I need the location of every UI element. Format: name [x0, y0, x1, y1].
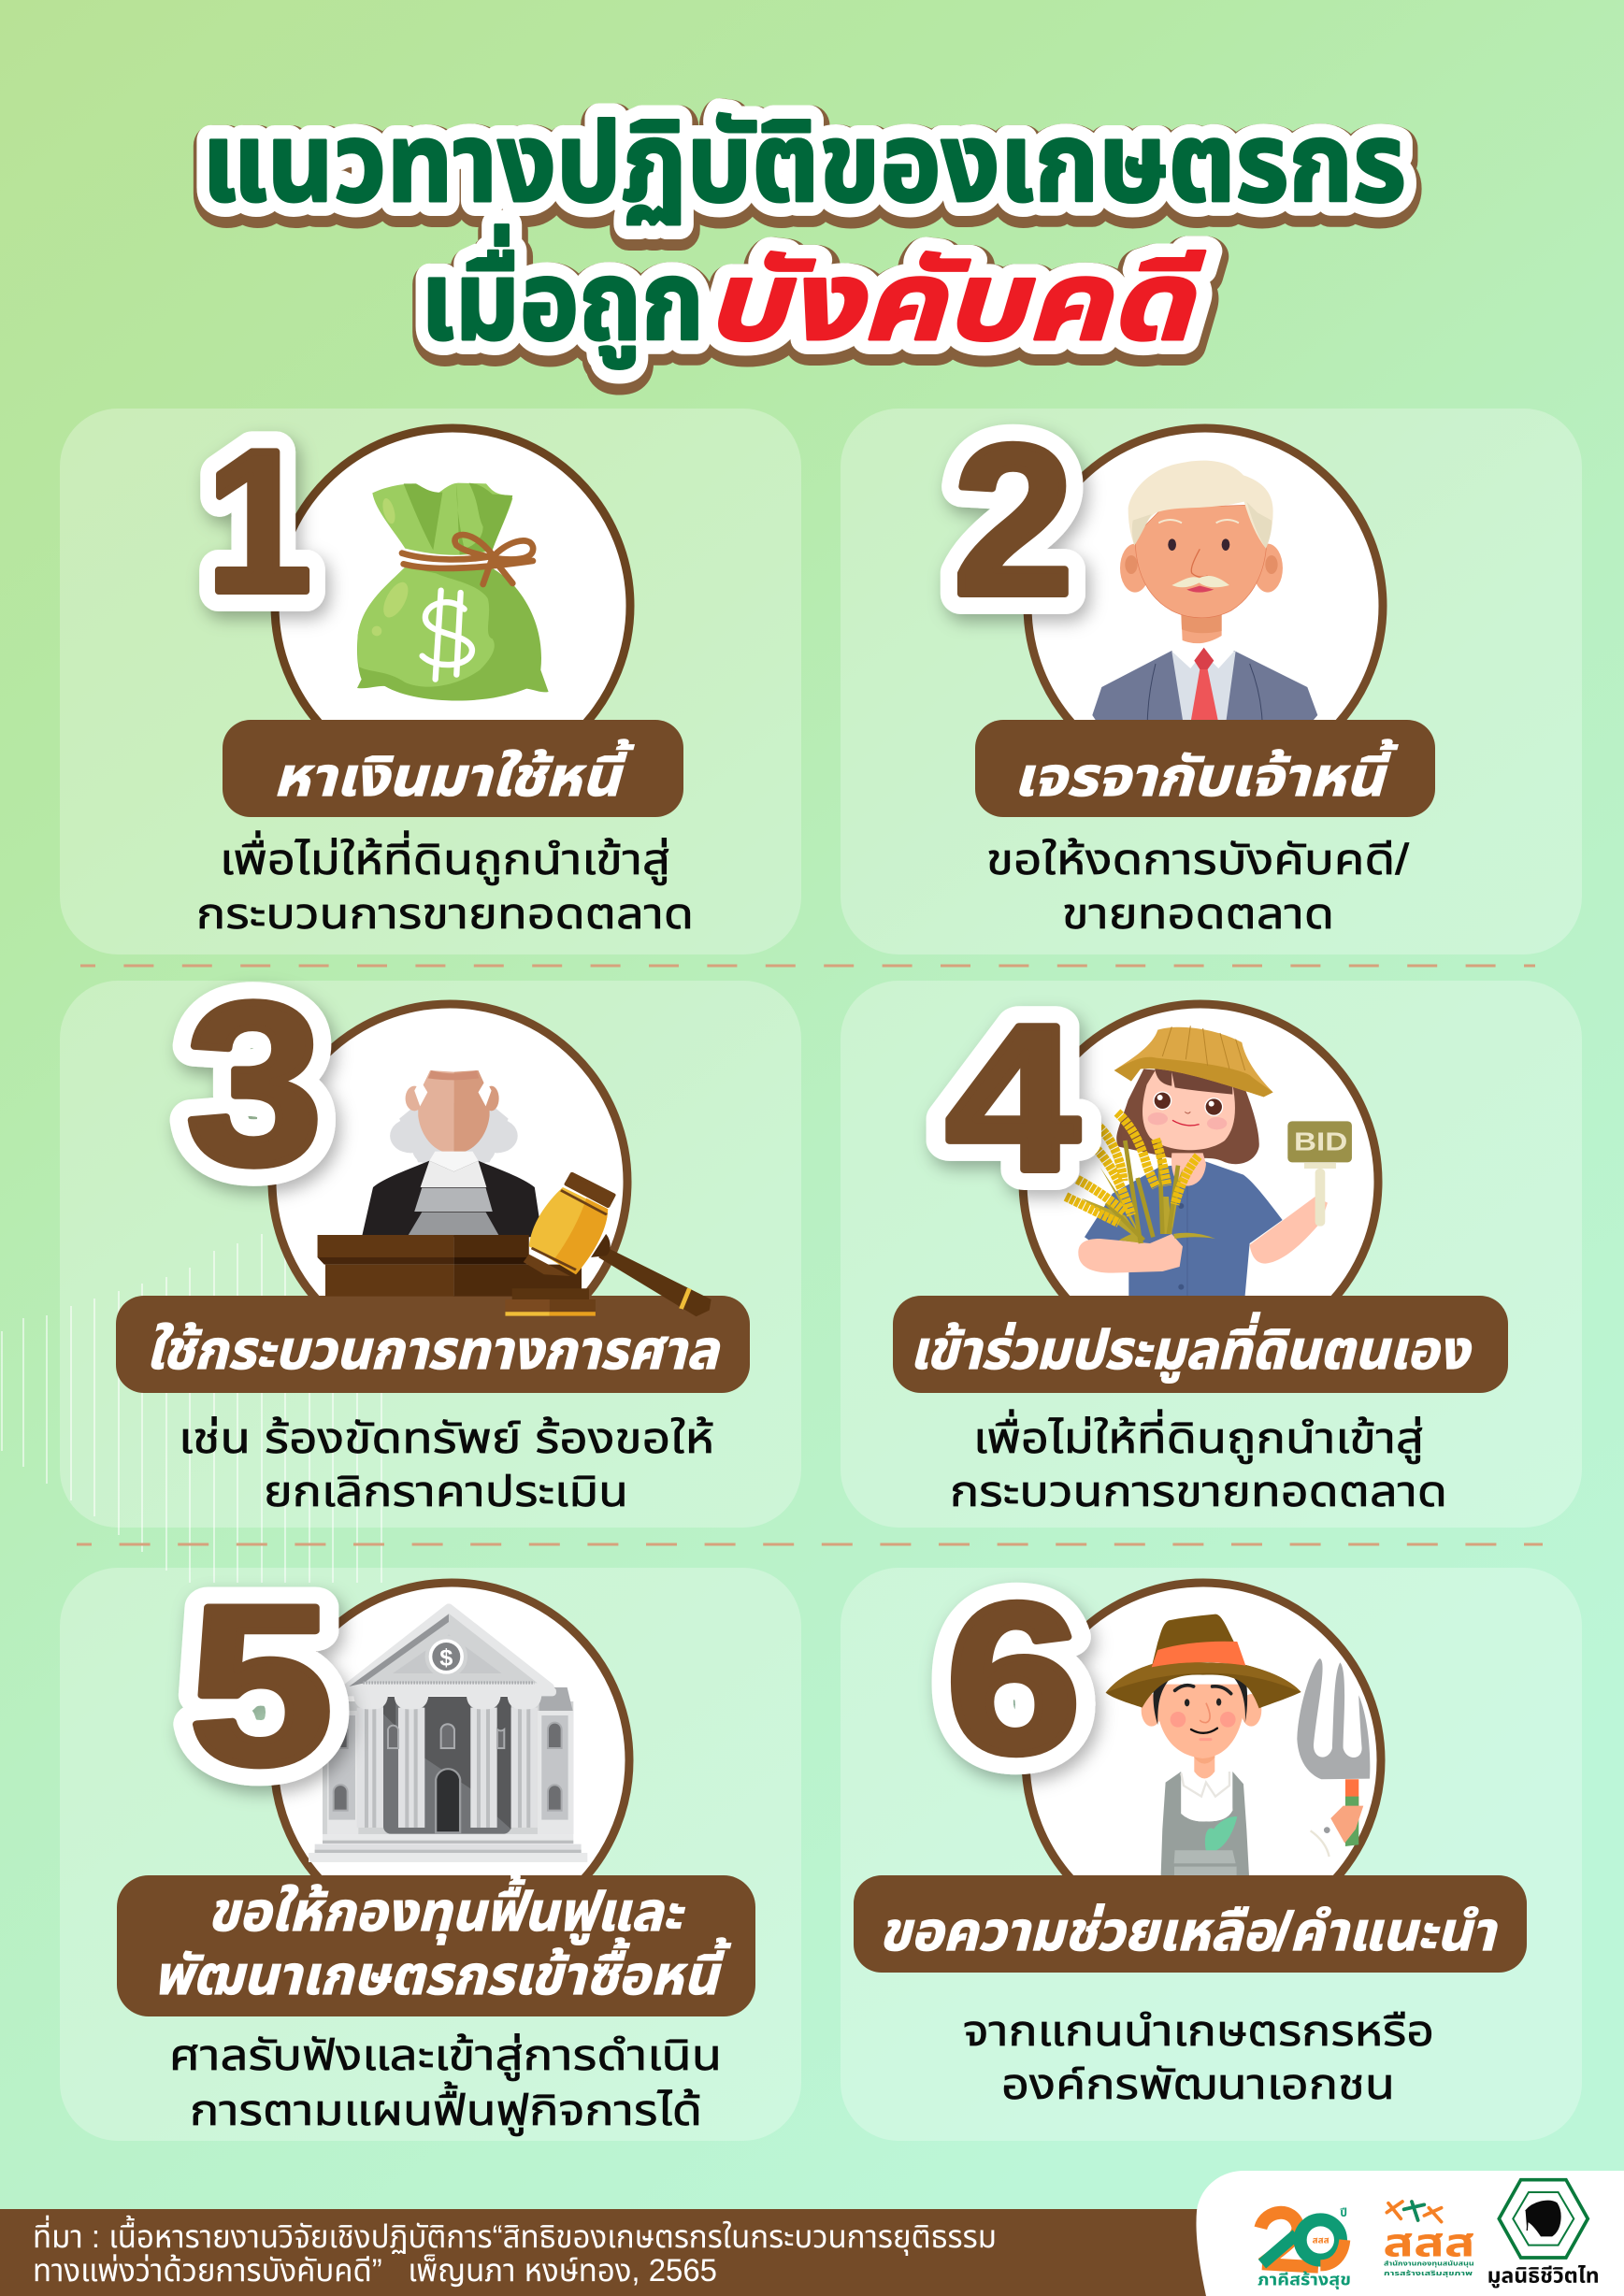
title: เมื่อถูก — [423, 230, 704, 374]
logo: 20 years: ภาคีสร้างสุข — [1258, 2271, 1351, 2290]
number 6: 6 — [946, 1560, 1081, 1798]
logo: Thai Life Foundation — [1487, 2180, 1600, 2288]
panel 2 — [841, 402, 1582, 954]
body 4 — [950, 1409, 1447, 1515]
number 4: 4 — [946, 983, 1079, 1214]
title: บังคับคดี — [705, 240, 1206, 364]
heading 5: พัฒนาเกษตรกรเข้าซื้อหนี้ — [153, 1937, 732, 2006]
logo: ThaiHealth — [1383, 2202, 1475, 2278]
logo: 20 years: สสส — [1313, 2235, 1329, 2246]
body 4: กระบวนการขายทอดตลาด — [950, 1467, 1447, 1515]
panel 1 — [60, 408, 801, 954]
heading 3: ใช้กระบวนการทางการศาล — [146, 1320, 720, 1381]
heading pill 3 — [116, 1296, 750, 1393]
number 2: 2 — [954, 402, 1073, 639]
body 6 — [963, 2006, 1434, 2108]
heading 6: ขอความช่วยเหลือ/คำแนะนำ — [879, 1901, 1498, 1962]
heading pill 4 — [893, 1296, 1508, 1393]
source text: ทางแพ่งว่าด้วยการบังคับคดี” เพ็ญนภา หงษ์ทอง, 2565 — [33, 2253, 717, 2289]
body 3: เช่น ร้องขัดทรัพย์ ร้องขอให้ — [179, 1413, 714, 1462]
body 6: จากแกนนำเกษตรกรหรือ — [963, 2006, 1434, 2055]
panel 4 — [841, 981, 1582, 1528]
title: บังคับคดี — [705, 240, 1206, 364]
footer source bar — [0, 2209, 1225, 2296]
title: แนวทางปฏิบัติของเกษตรกร — [202, 102, 1406, 225]
logo: 20 years: ปี — [1340, 2206, 1347, 2219]
title: แนวทางปฏิบัติของเกษตรกร — [202, 102, 1406, 225]
body 6: องค์กรพัฒนาเอกชน — [1001, 2059, 1395, 2108]
body 3 — [179, 1413, 714, 1515]
body 5 — [169, 2031, 722, 2136]
title: เมื่อถูก — [421, 224, 704, 368]
number 3: 3 — [186, 955, 323, 1213]
logo: ThaiHealth: สสส — [1383, 2220, 1475, 2264]
icon: farmer woman with rice: BID — [1294, 1127, 1347, 1156]
icon: old man in suit — [1092, 461, 1317, 720]
footer logos tab — [1196, 2171, 1624, 2296]
panel 5 — [60, 1559, 801, 2141]
logo: Thai Life Foundation: มูลนิธิชีวิตไท — [1487, 2263, 1600, 2288]
source text — [33, 2215, 997, 2289]
body 5: การตามแผนฟื้นฟูกิจการได้ — [190, 2081, 702, 2136]
heading 4: เข้าร่วมประมูลที่ดินตนเอง — [910, 1312, 1472, 1384]
panel 3 — [60, 955, 801, 1528]
heading 2: เจรจากับเจ้าหนี้ — [1013, 739, 1399, 808]
title: แนวทางปฏิบัติของเกษตรกร — [204, 108, 1406, 231]
logo: 20 years — [1258, 2206, 1351, 2290]
logo: ThaiHealth: การสร้างเสริมสุขภาพ — [1384, 2270, 1473, 2278]
title: เมื่อถูก — [421, 224, 704, 368]
body 5: ศาลรับฟังและเข้าสู่การดำเนิน — [169, 2031, 722, 2081]
source text: ที่มา : เนื้อหารายงานวิจัยเชิงปฏิบัติการ“สิทธิของเกษตรกรในกระบวนการยุติธรรม — [33, 2215, 997, 2256]
panel 6 — [841, 1560, 1582, 2141]
number 4: 4 — [946, 983, 1079, 1214]
body 2 — [986, 835, 1409, 938]
body 2: ขอให้งดการบังคับคดี/ — [986, 835, 1409, 883]
number 3: 3 — [186, 955, 323, 1213]
number 1: 1 — [207, 408, 311, 634]
number 1: 1 — [207, 408, 311, 634]
icon: bank building — [309, 1608, 587, 1862]
heading 5 — [153, 1873, 732, 2006]
body 1: เพื่อไม่ให้ที่ดินถูกนำเข้าสู่ — [220, 830, 670, 885]
body 1 — [196, 830, 694, 938]
heading pill 1 — [223, 720, 683, 817]
body 2: ขายทอดตลาด — [1062, 889, 1334, 938]
divider — [80, 965, 1535, 967]
logo: ThaiHealth: สำนักงานกองทุนสนับสนุน — [1384, 2260, 1474, 2268]
heading 5: ขอให้กองทุนฟื้นฟูและ — [208, 1873, 685, 1945]
body 3: ยกเลิกราคาประเมิน — [264, 1467, 628, 1515]
heading pill 6 — [854, 1875, 1527, 1973]
number 5: 5 — [189, 1559, 333, 1812]
heading pill 5 — [117, 1875, 755, 2016]
icon: male farmer with fork — [1106, 1614, 1370, 1875]
title — [202, 102, 1406, 374]
background vertical lines — [2, 1187, 381, 1583]
body 1: กระบวนการขายทอดตลาด — [196, 889, 694, 938]
heading pill 2 — [975, 720, 1435, 817]
icon: farmer woman with rice — [1066, 1026, 1352, 1296]
divider — [77, 1543, 1543, 1546]
icon: judge with gavel — [318, 1070, 711, 1316]
number 6: 6 — [946, 1560, 1081, 1798]
title: บังคับคดี — [707, 246, 1206, 369]
number 2: 2 — [954, 402, 1073, 639]
body 4: เพื่อไม่ให้ที่ดินถูกนำเข้าสู่ — [973, 1409, 1424, 1464]
icon: money bag — [357, 483, 549, 700]
heading 1: หาเงินมาใช้หนี้ — [273, 739, 635, 808]
number 5: 5 — [189, 1559, 333, 1812]
icon: bank building: $ — [439, 1645, 453, 1672]
